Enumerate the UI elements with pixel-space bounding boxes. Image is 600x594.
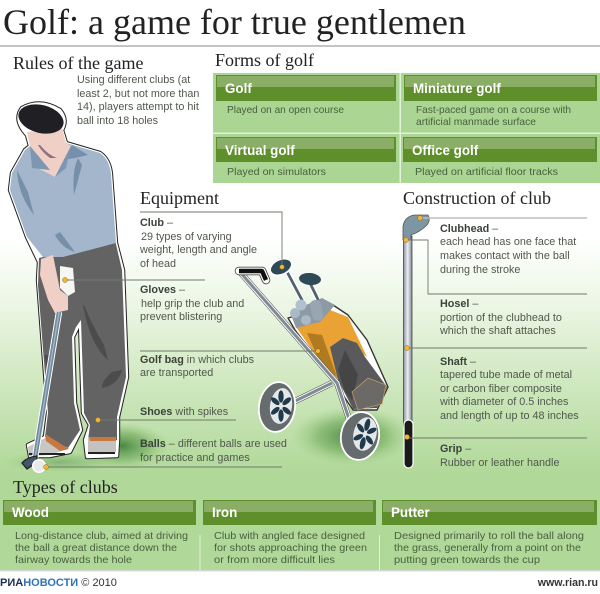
text: hosel: which the shaft attaches [439, 325, 556, 337]
text: balls: for practice and games [140, 452, 250, 464]
card: wood: the ball a great distance down the [15, 542, 177, 554]
handle [239, 271, 266, 280]
card: virtual golf: Virtual golf [225, 143, 295, 158]
text: shaft: Shaft – [440, 356, 476, 368]
text: club: 29 types of varying [141, 231, 232, 243]
text: hosel: Hosel – [440, 298, 478, 310]
text: shaft: tapered tube made of metal [440, 369, 572, 381]
ball [33, 460, 45, 472]
card: putter [382, 500, 597, 566]
card: office golf: Office golf [412, 143, 479, 158]
club tops [290, 298, 335, 328]
card: wood: fairway towards the hole [15, 554, 132, 566]
panel: forms of golf [213, 73, 600, 183]
card: putter: putting green towards the cup [394, 554, 540, 566]
shaft [404, 236, 412, 426]
text: club: weight, length and angle [139, 244, 257, 256]
trousers [38, 240, 126, 448]
title: Golf: a game for true gentlemen [3, 2, 466, 42]
heading: equipment: Equipment [140, 188, 219, 208]
card: putter: Putter [391, 505, 430, 520]
card: office golf: Played on artificial floor tracks [415, 166, 558, 178]
card: wood: Wood [12, 505, 49, 520]
wheel right [337, 409, 383, 463]
left shoe [28, 437, 68, 456]
heading: types of clubs: Types of clubs [13, 477, 118, 497]
card: miniature golf: Miniature golf [413, 81, 501, 96]
text: rules description: Using different clubs (at [77, 74, 190, 86]
card: iron: Club with angled face designed [214, 530, 365, 542]
bag [288, 305, 388, 410]
card: miniature golf [404, 75, 597, 128]
text: grip: Grip – [440, 443, 471, 455]
card: iron: Iron [212, 505, 237, 520]
text: golf bag: Golf bag in which clubs [140, 354, 254, 366]
text: club: Club – [140, 217, 173, 229]
card: golf: Played on an open course [227, 104, 344, 116]
text: rules description: least 2, but not more than [77, 88, 199, 100]
text: hosel: portion of the clubhead to [440, 312, 562, 324]
card: office golf [403, 137, 597, 178]
ground shadows [0, 406, 414, 473]
arms and hands [40, 255, 68, 313]
callout dots [44, 216, 422, 470]
text: golf bag: are transported [140, 367, 213, 379]
card: miniature golf: Fast-paced game on a course with [416, 104, 571, 116]
illustration: club construction [403, 215, 429, 468]
heading: construction of club: Construction of club [403, 188, 551, 208]
grip [404, 420, 413, 468]
card: virtual golf [216, 137, 396, 178]
text: clubhead: during the stroke [440, 264, 520, 276]
text: shaft: or carbon fiber composite [440, 383, 562, 395]
cap [15, 100, 67, 138]
footer: logo and copyright: РИАНОВОСТИ © 2010 [0, 577, 117, 589]
text: shaft: and length of up to 48 inches [440, 410, 579, 422]
shirt [10, 143, 116, 257]
callout lines: construction [406, 218, 587, 438]
right shoe [88, 437, 116, 454]
text: clubhead: each head has one face that [440, 236, 576, 248]
text: gloves: Gloves – [140, 284, 185, 296]
text: gloves: prevent blistering [140, 311, 222, 323]
card: wood: Long-distance club, aimed at driving [15, 530, 188, 542]
clubhead [403, 215, 429, 240]
trolley frame [240, 272, 350, 422]
card: golf: Golf [225, 81, 252, 96]
club heads [285, 268, 327, 318]
callout lines: equipment [46, 212, 318, 467]
illustration: golfer [10, 100, 127, 472]
card: golf [216, 75, 396, 116]
text: shaft: with diameter of 0.5 inches [439, 396, 569, 408]
footer: website: www.rian.ru [537, 577, 598, 589]
card: virtual golf: Played on simulators [227, 166, 326, 178]
wheel left [256, 380, 298, 434]
card: iron: for shots approaching the green [214, 542, 367, 554]
text: rules description: 14), players attempt to hit [77, 101, 199, 113]
collar [30, 146, 71, 177]
heading: rules of the game: Rules of the game [13, 53, 143, 73]
text: rules description: ball into 18 holes [77, 115, 159, 127]
heading: forms of golf: Forms of golf [215, 50, 314, 70]
golf club [35, 312, 59, 458]
card: iron [203, 500, 376, 566]
text: shoes: Shoes with spikes [140, 406, 229, 418]
neck and face [27, 128, 71, 177]
panel: types of clubs [3, 500, 597, 570]
text: clubhead: Clubhead – [440, 223, 498, 235]
text: grip: Rubber or leather handle [440, 457, 559, 469]
card: putter: Designed primarily to roll the ball along [394, 530, 584, 542]
card: wood [3, 500, 196, 566]
card: iron: or from more difficult lies [214, 554, 335, 566]
text: club: of head [140, 258, 176, 270]
text: clubhead: makes contact with the ball [440, 250, 570, 262]
text: gloves: help grip the club and [141, 298, 244, 310]
card: miniature golf: artificial manmade surface [416, 116, 536, 128]
card: putter: the grass, generally from a point on the [394, 542, 581, 554]
illustration: golf bag on trolley [239, 255, 388, 463]
text: balls: Balls – different balls are used [140, 438, 287, 450]
